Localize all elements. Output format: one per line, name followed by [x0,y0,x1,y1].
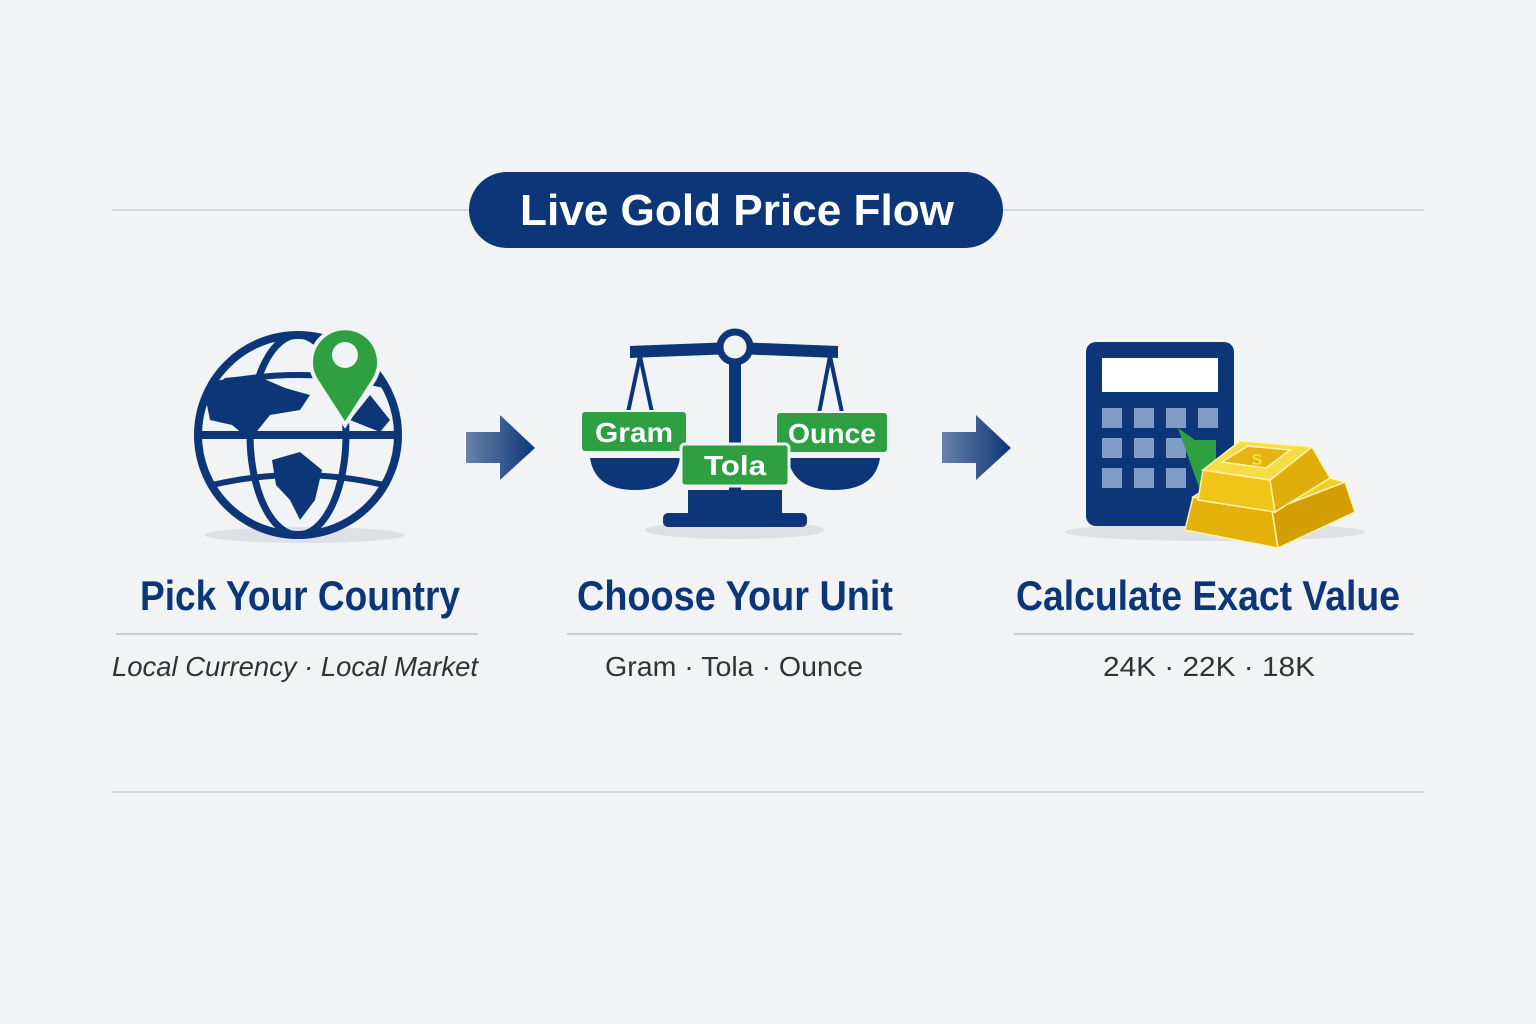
step 3: heading: Calculate Exact Value [1016,572,1400,619]
title [469,172,1003,248]
arrow 2 [942,415,1011,480]
icon: globe with pin [198,328,405,543]
icon: calculator with gold bar [1065,342,1365,548]
step 2: heading: Choose Your Unit [577,572,893,619]
icon: location pin [311,328,379,425]
step 2: subtext: Gram · Tola · Ounce [605,651,863,682]
step 1: heading: Pick Your Country [140,572,461,619]
icon: gold bar: S [1252,452,1263,469]
step 1: subtext: Local Currency · Local Market [112,651,479,682]
label: Gram [581,411,687,452]
icon: balance scale with unit labels [581,332,888,539]
icon: gold bar [1185,441,1355,548]
label: Gram: Gram [595,417,673,448]
label: Ounce: Ounce [788,418,876,449]
arrow 1 [466,415,535,480]
label: Tola [681,444,789,486]
label: Tola: Tola [704,450,766,481]
label: Ounce [776,412,888,453]
title: Live Gold Price Flow [520,186,955,235]
step 3: subtext: 24K · 22K · 18K [1103,651,1315,682]
